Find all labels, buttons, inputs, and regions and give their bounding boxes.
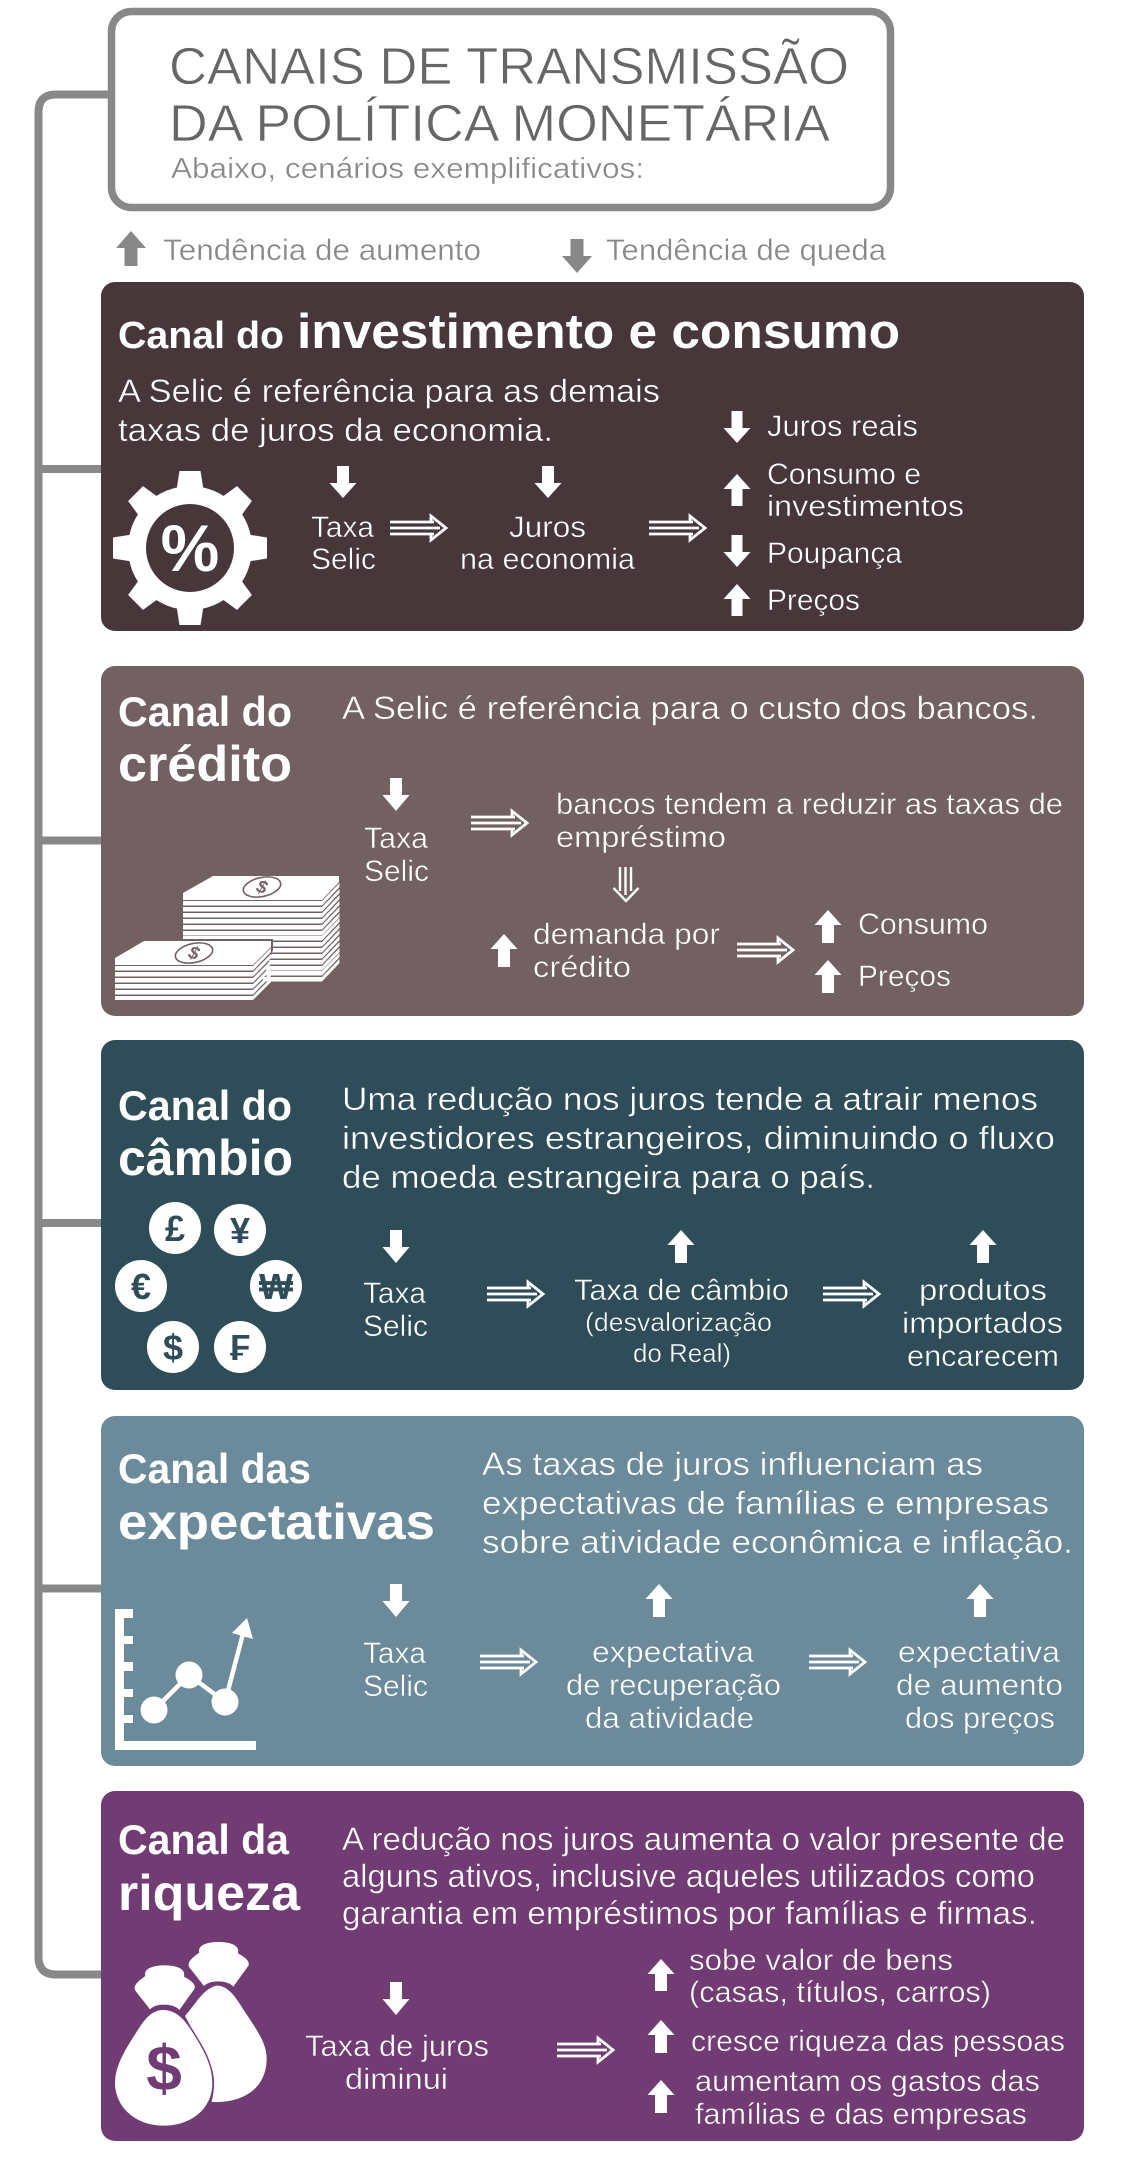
heading: câmbio [118, 1130, 293, 1186]
description: A redução nos juros aumenta o valor presente de [342, 1821, 1065, 1857]
effects list: investimentos [767, 490, 964, 523]
arrow: implies [823, 1282, 879, 1306]
arrow: imports up [970, 1230, 996, 1263]
text: price expectation: expectativa [898, 1636, 1060, 1669]
arrow: exchange up [668, 1230, 694, 1263]
arrow: implies [737, 938, 793, 962]
description: de moeda estrangeira para o país. [342, 1159, 875, 1195]
text: banks [556, 788, 1063, 854]
text: exchange rate: do Real) [633, 1338, 731, 1368]
arrow: juros down [534, 466, 562, 498]
icon: gray up arrow [116, 231, 146, 266]
icon: money bags: $ [146, 2032, 182, 2104]
effects list: Consumo [858, 908, 988, 941]
panel: crédito [101, 666, 1084, 1016]
text: price expectation [896, 1636, 1063, 1735]
text: recovery expectation: de recuperação [566, 1669, 781, 1702]
label: juros na economia: Juros [509, 511, 586, 544]
description: A Selic é referência para as demais [118, 373, 660, 409]
title box [112, 12, 890, 208]
description: As taxas de juros influenciam as [482, 1446, 983, 1482]
arrow: implies [557, 2038, 613, 2062]
heading: crédito [118, 736, 292, 792]
text: exchange rate [574, 1274, 789, 1368]
effects list [648, 1944, 1065, 2131]
icon: currency coins: £ [165, 1208, 185, 1249]
arrow: selic down [330, 466, 356, 498]
label: taxa selic [363, 1637, 428, 1703]
icon: currency coins: ₩ [259, 1266, 293, 1307]
effects list: Juros reais [767, 410, 918, 443]
heading [118, 688, 292, 792]
label: juros na economia [460, 511, 635, 576]
description: A Selic é referência para o custo dos bancos. [342, 690, 1038, 726]
label: taxa selic: Taxa [363, 1277, 426, 1310]
panel background [101, 1040, 1084, 1390]
heading: expectativas [118, 1494, 435, 1550]
text: imports: encarecem [907, 1340, 1059, 1373]
description: Uma redução nos juros tende a atrair menos [342, 1081, 1038, 1117]
icon: currency coins: ¥ [230, 1210, 250, 1251]
effects list: Preços [858, 960, 951, 993]
text: credit demand: demanda por [533, 918, 720, 951]
legend: decrease: Tendência de queda [606, 234, 886, 267]
description [118, 373, 660, 448]
description: sobre atividade econômica e inflação. [482, 1524, 1073, 1560]
heading: Canal do [118, 1082, 292, 1129]
arrow: implies [390, 516, 446, 540]
label: taxa selic: Selic [364, 855, 429, 888]
icon: gray down arrow [562, 239, 592, 273]
text: exchange rate: Taxa de câmbio [574, 1274, 789, 1307]
title frame [112, 12, 890, 208]
subtitle: Abaixo, cenários exemplificativos: [171, 153, 644, 185]
arrow: implies [487, 1282, 543, 1306]
description: taxas de juros da economia. [118, 412, 553, 448]
description: expectativas de famílias e empresas [482, 1485, 1049, 1521]
text: price expectation: dos preços [905, 1702, 1055, 1735]
label: taxa selic: Selic [363, 1670, 428, 1703]
heading: Canal das [118, 1445, 311, 1492]
arrow: implies [471, 811, 527, 835]
heading: Canal da [118, 1816, 290, 1863]
text: exchange rate: (desvalorização [585, 1307, 772, 1337]
heading [118, 1445, 435, 1550]
legend [116, 231, 886, 273]
arrow: implies [480, 1650, 536, 1674]
panel: investimento e consumo [101, 282, 1084, 631]
icon: currency coins [115, 1202, 302, 1373]
arrow: implies [649, 516, 705, 540]
label: taxa selic: Taxa [311, 511, 374, 544]
arrow: selic down [382, 778, 410, 811]
panel: câmbio [101, 1040, 1084, 1390]
arrow: recovery up [646, 1584, 672, 1617]
description [342, 1081, 1055, 1195]
icon: stacks of banknotes: $ [253, 876, 271, 898]
label: taxa selic: Selic [311, 543, 376, 576]
text: recovery expectation: expectativa [592, 1636, 754, 1669]
icon: money bags [115, 1942, 267, 2126]
description: garantia em empréstimos por famílias e firmas. [342, 1895, 1037, 1931]
effects list [724, 410, 964, 617]
heading: Canal do [118, 688, 292, 735]
text: recovery expectation [566, 1636, 781, 1735]
text: imports: importados [902, 1307, 1063, 1340]
label: taxa selic [364, 822, 429, 888]
icon: currency coins: $ [163, 1327, 183, 1368]
icon: currency coins: ₣ [230, 1327, 250, 1368]
text: imports: produtos [919, 1274, 1047, 1307]
arrow: rate down [382, 1982, 410, 2015]
effects list: Consumo e [767, 458, 921, 491]
panel background [101, 282, 1084, 631]
arrow: selic down [382, 1230, 410, 1263]
label: taxa selic: Taxa [364, 822, 428, 855]
label: taxa de juros diminui: Taxa de juros [305, 2030, 489, 2063]
heading: riqueza [118, 1865, 301, 1921]
panel: riqueza [101, 1791, 1084, 2141]
icon: stacks of banknotes [112, 874, 340, 1002]
icon: gear with percent [113, 471, 267, 625]
effects list: sobe valor de bens [689, 1944, 953, 1977]
text: price expectation: de aumento [896, 1669, 1063, 1702]
heading: investimento e consumo [297, 305, 900, 359]
label: juros na economia: na economia [460, 543, 635, 576]
icon: rising line chart [115, 1609, 256, 1750]
text: banks: bancos tendem a reduzir as taxas de [556, 788, 1063, 821]
panel background [101, 1791, 1084, 2141]
title: CANAIS DE TRANSMISSÃO [169, 38, 849, 96]
label: taxa de juros diminui [305, 2030, 489, 2096]
panel background [101, 1416, 1084, 1766]
heading [118, 1082, 293, 1186]
heading: Canal do [118, 315, 284, 357]
effects list: Poupança [767, 537, 902, 570]
heading [118, 1816, 301, 1921]
icon: stacks of banknotes: $ [185, 942, 203, 964]
effects list: cresce riqueza das pessoas [691, 2025, 1065, 2058]
panel: expectativas [101, 1416, 1084, 1766]
text: imports [902, 1274, 1063, 1373]
effects list: famílias e das empresas [695, 2098, 1027, 2131]
panel background [101, 666, 1084, 1016]
title: DA POLÍTICA MONETÁRIA [169, 95, 830, 153]
arrow: selic down [382, 1584, 410, 1617]
icon: gear with percent: % [161, 511, 219, 585]
effects list: (casas, títulos, carros) [689, 1976, 991, 2009]
text: credit demand [533, 918, 720, 984]
text: credit demand: crédito [533, 951, 631, 984]
arrow: implies down [614, 867, 638, 901]
icon: currency coins: € [131, 1266, 151, 1307]
effects list: Preços [767, 584, 860, 617]
arrow: prices up [966, 1584, 994, 1617]
connector lines [38, 94, 108, 1974]
label: taxa de juros diminui: diminui [345, 2063, 448, 2096]
arrow: demand up [490, 934, 518, 967]
effects list [814, 908, 988, 993]
title [169, 38, 849, 153]
arrow: implies [809, 1650, 865, 1674]
effects list: aumentam os gastos das [695, 2065, 1040, 2098]
description [342, 1821, 1065, 1931]
text: banks: empréstimo [556, 821, 726, 854]
description: investidores estrangeiros, diminuindo o fluxo [342, 1120, 1055, 1156]
label: taxa selic [311, 511, 376, 576]
legend: increase: Tendência de aumento [163, 234, 481, 267]
description [482, 1446, 1073, 1560]
description: alguns ativos, inclusive aqueles utilizados como [342, 1858, 1035, 1894]
label: taxa selic: Taxa [363, 1637, 426, 1670]
label: taxa selic: Selic [363, 1310, 428, 1343]
text: recovery expectation: da atividade [585, 1702, 754, 1735]
label: taxa selic [363, 1277, 428, 1343]
